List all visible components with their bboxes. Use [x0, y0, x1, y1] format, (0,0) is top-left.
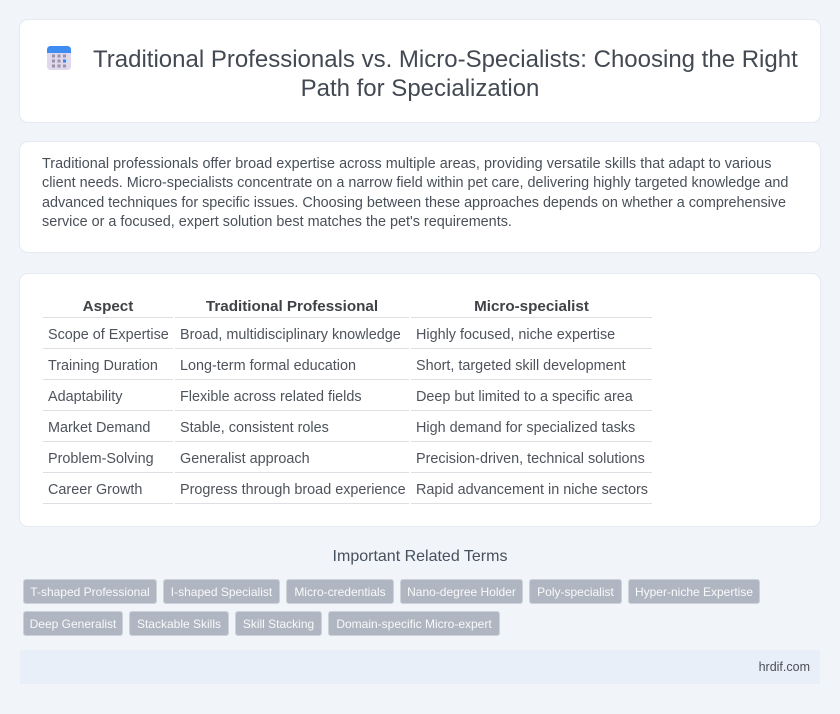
text block: introduction: client needs. Micro-specialists concentrate on a narrow field within pet care, delivering highly targeted knowledge and: [42, 175, 788, 191]
table header: Aspect: [83, 298, 133, 315]
tag: [163, 579, 280, 604]
row: problem-solving: Generalist approach: [180, 451, 310, 467]
text block: introduction: service or a focused, expert solution best matches the pet's requirements.: [42, 214, 512, 230]
table header: Traditional Professional: [206, 298, 378, 315]
tag: Skill Stacking: [243, 617, 314, 631]
row: scope of expertise: [48, 327, 615, 343]
tag: [286, 579, 394, 604]
row: scope of expertise: Broad, multidisciplinary knowledge: [180, 327, 401, 343]
row: market demand: [48, 420, 635, 436]
tag: [529, 579, 622, 604]
table header: Micro-specialist: [474, 298, 589, 315]
row: scope of expertise: Scope of Expertise: [48, 327, 169, 343]
title: Traditional Professionals vs. Micro-Specialists: Choosing the Right: [93, 46, 798, 73]
panel: title card: [20, 20, 820, 122]
title: Path for Specialization: [301, 75, 539, 102]
row: problem-solving: Problem-Solving: [48, 451, 154, 467]
table header: [83, 298, 589, 315]
row: career growth: [48, 482, 648, 498]
row: market demand: Stable, consistent roles: [180, 420, 329, 436]
row: career growth: Progress through broad experience: [180, 482, 406, 498]
tag: [23, 611, 123, 636]
row: problem-solving: Precision-driven, technical solutions: [416, 451, 645, 467]
panel: introduction: [20, 142, 820, 252]
row: training duration: Long-term formal education: [180, 358, 356, 374]
tag: [628, 579, 760, 604]
tag: Domain-specific Micro-expert: [336, 617, 492, 631]
tag: Hyper-niche Expertise: [635, 585, 753, 599]
tag: T-shaped Professional: [30, 585, 150, 599]
tag: [400, 579, 523, 604]
title: [93, 46, 798, 102]
row: training duration: [48, 358, 626, 374]
tag: [328, 611, 500, 636]
row: training duration: Training Duration: [48, 358, 158, 374]
panel: comparison table: [20, 274, 820, 526]
row: problem-solving: [48, 451, 645, 467]
tag: Deep Generalist: [30, 617, 116, 631]
tag: I-shaped Specialist: [171, 585, 272, 599]
row: career growth: Rapid advancement in niche sectors: [416, 482, 648, 498]
icon: calendar: [47, 46, 71, 70]
row: market demand: High demand for specialized tasks: [416, 420, 635, 436]
row: adaptability: Adaptability: [48, 389, 122, 405]
row: career growth: Career Growth: [48, 482, 142, 498]
tag: Micro-credentials: [294, 585, 386, 599]
text block: introduction: advanced techniques for specific issues. Choosing between these approaches depends on whether a comprehensive: [42, 195, 786, 211]
tag: [23, 579, 157, 604]
tag: [235, 611, 322, 636]
row: market demand: Market Demand: [48, 420, 150, 436]
tag: [129, 611, 229, 636]
text block: introduction: Traditional professionals offer broad expertise across multiple areas, providing versatile skills that adapt to various: [42, 156, 771, 172]
tag group: related terms: [23, 579, 760, 636]
tag: Stackable Skills: [137, 617, 221, 631]
footer bar: [20, 650, 820, 684]
tag: Nano-degree Holder: [407, 585, 516, 599]
row: adaptability: Deep but limited to a specific area: [416, 389, 633, 405]
row: scope of expertise: Highly focused, niche expertise: [416, 327, 615, 343]
tag: Poly-specialist: [537, 585, 614, 599]
row: training duration: Short, targeted skill development: [416, 358, 626, 374]
row: adaptability: Flexible across related fields: [180, 389, 362, 405]
footer source: hrdif.com: [759, 660, 810, 674]
text block: introduction: [42, 156, 788, 230]
heading: related terms: Important Related Terms: [333, 548, 507, 565]
row: adaptability: [48, 389, 633, 405]
